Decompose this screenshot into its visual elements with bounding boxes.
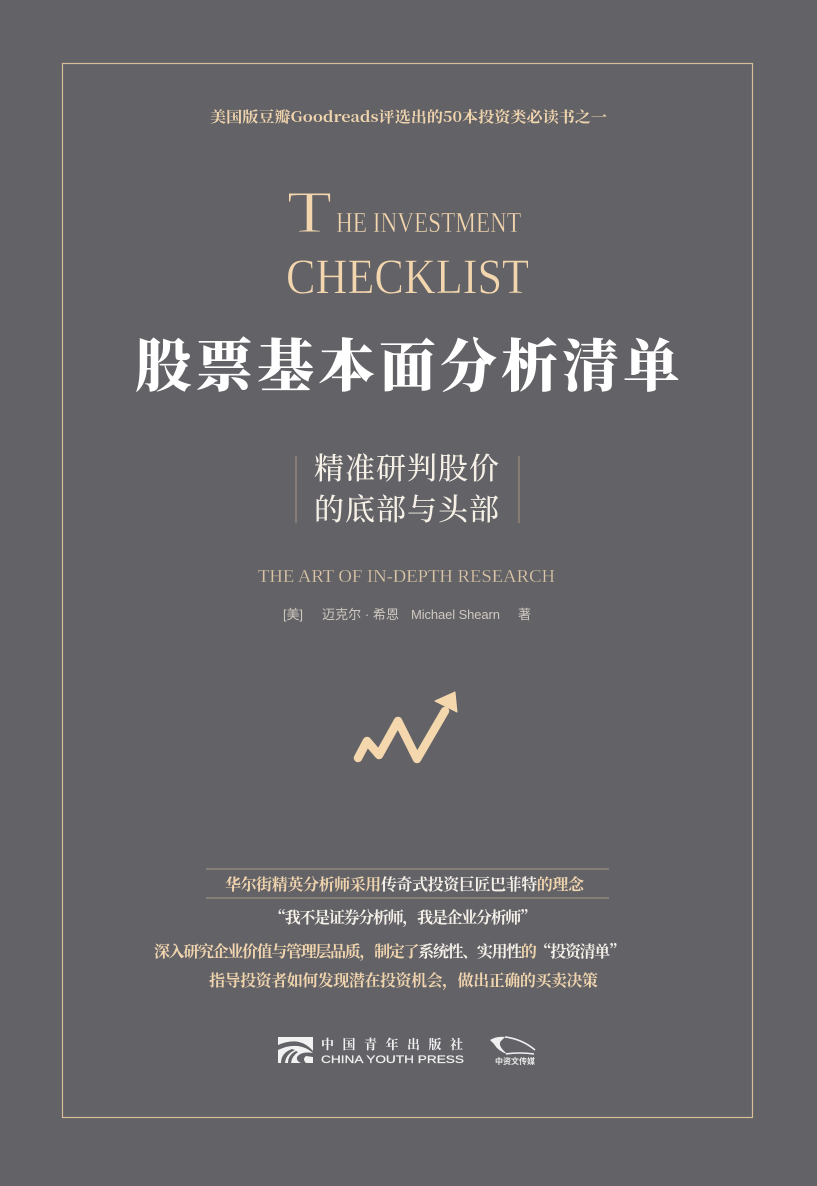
- English title: HE INVESTMENT: [336, 207, 521, 239]
- bottom text block: 指导投资者如何发现潜在投资机会，做出正确的买卖决策: [209, 968, 598, 991]
- top tagline: 美国版豆瓣Goodreads评选出的50本投资类必读书之一: [210, 106, 607, 127]
- bottom text block: “我不是证券分析师，我是企业分析师”: [270, 905, 536, 928]
- subtitle block: [296, 444, 519, 529]
- author line: Michael Shearn: [411, 607, 500, 622]
- Chinese main title: 股票基本面分析清单: [135, 321, 680, 403]
- bottom text block: [154, 872, 625, 991]
- bottom text block: 华尔街精英分析师采用传奇式投资巨匠巴菲特的理念: [225, 872, 585, 895]
- gold frame: [62, 64, 752, 1118]
- author line: [美]: [283, 607, 303, 622]
- publisher logo: eagle: [490, 1037, 535, 1066]
- author line: 著: [518, 607, 531, 622]
- publisher logo: eagle: 中资文传媒: [495, 1056, 535, 1066]
- bottom text block: 深入研究企业价值与管理层品质，制定了系统性、实用性的“投资清单”: [154, 939, 625, 962]
- English title: CHECKLIST: [286, 248, 529, 304]
- subtitle block: 的底部与头部: [314, 485, 499, 529]
- English title: [286, 179, 529, 304]
- publisher logo: China Youth Press: CHINA YOUTH PRESS: [321, 1054, 464, 1066]
- English title: T: [287, 179, 332, 245]
- author line: [283, 607, 531, 622]
- publisher logo: China Youth Press: [278, 1034, 464, 1066]
- author line: 迈克尔 · 希恩: [322, 607, 399, 622]
- icon: rising arrow: [358, 692, 457, 759]
- subtitle block: 精准研判股价: [314, 444, 499, 488]
- English subtitle: THE ART OF IN-DEPTH RESEARCH: [258, 566, 555, 586]
- publisher logo: China Youth Press: 中国青年出版社: [321, 1034, 463, 1053]
- bottom rules: [206, 869, 609, 898]
